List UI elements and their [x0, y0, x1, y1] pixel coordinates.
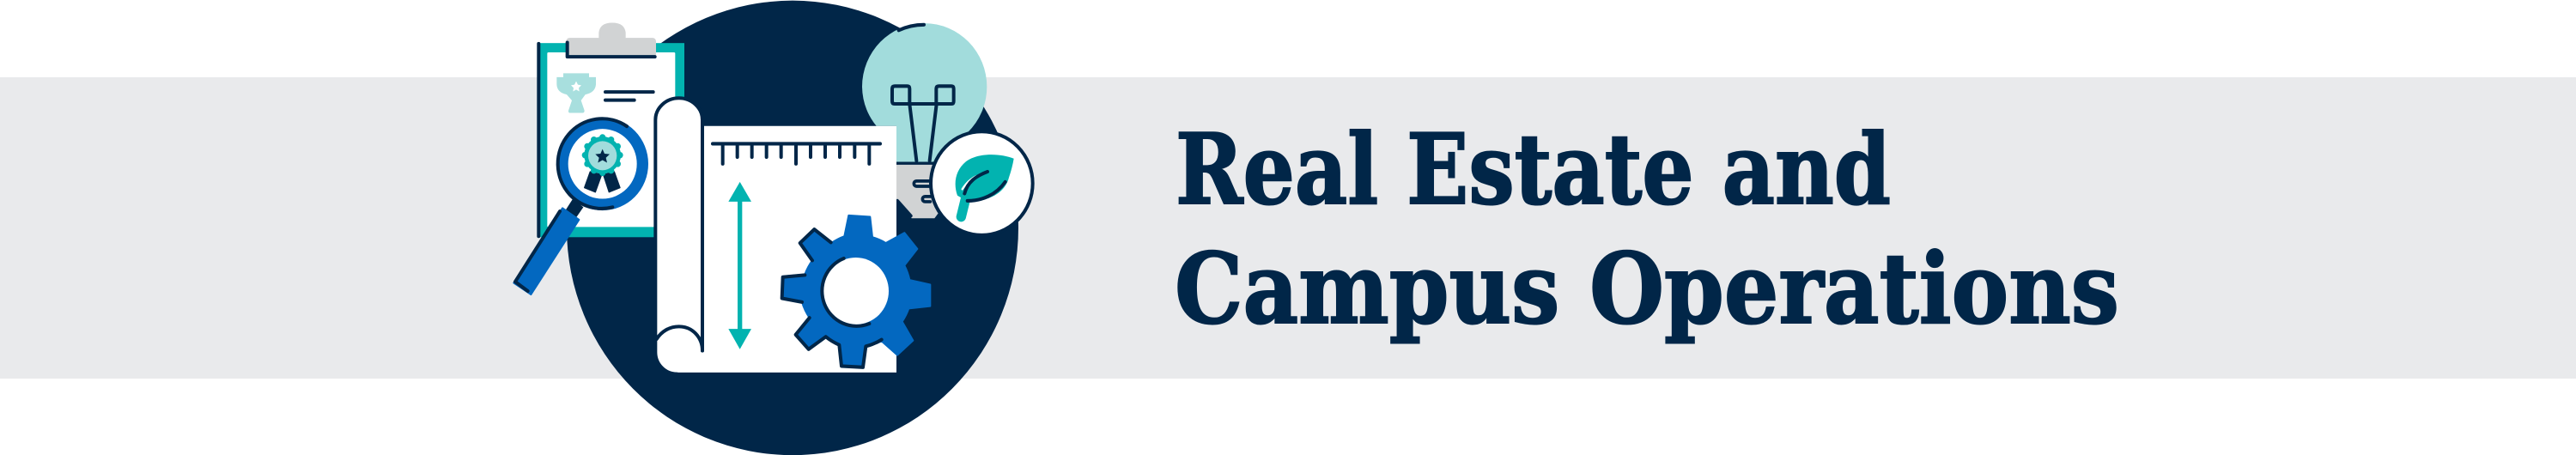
clipboard clip	[566, 22, 656, 58]
illustration	[513, 1, 1033, 455]
background band	[0, 77, 2576, 379]
certificate text lines	[605, 92, 653, 100]
double-headed arrow	[728, 182, 751, 349]
heading line 1: Real Estate and	[1176, 112, 1891, 227]
navy circle	[567, 1, 1018, 455]
icon: trophy	[556, 73, 596, 113]
icon: gear	[782, 215, 930, 367]
heading line 2: Campus Operations	[1175, 232, 2119, 346]
icon: leaf badge	[931, 131, 1033, 235]
blueprint scroll	[655, 98, 896, 374]
ruler	[713, 143, 880, 164]
heading	[1175, 112, 2119, 346]
icon: light bulb	[862, 23, 987, 218]
ribbon award	[582, 134, 623, 192]
icon: magnifying glass with ribbon	[513, 118, 648, 294]
clipboard	[538, 22, 684, 237]
